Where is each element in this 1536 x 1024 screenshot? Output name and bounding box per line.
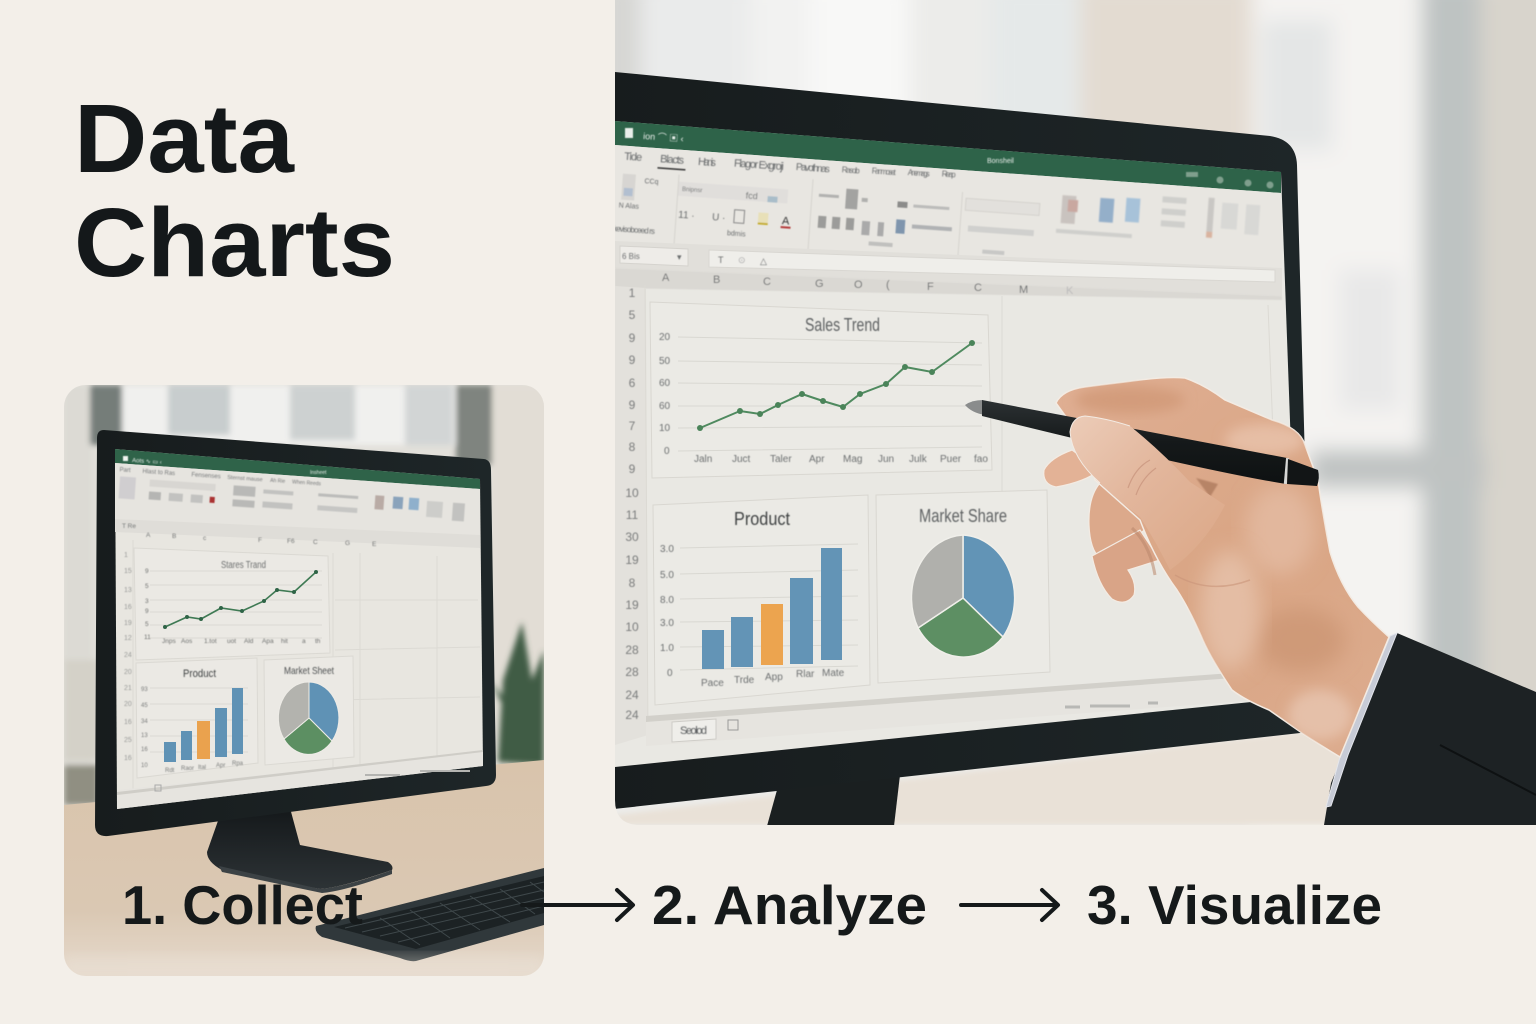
arrow from step 2 to step 3 [961, 890, 1058, 920]
line chart: sales trend: Mag [843, 454, 862, 465]
ribbon: Fensenses [191, 472, 221, 480]
line chart: stares trend: Jnps [162, 638, 176, 645]
line chart: sales trend: Sales Trend [805, 315, 880, 335]
desk surface [618, 733, 1340, 825]
formula and column strip: T Re [122, 523, 136, 530]
bar chart: product [136, 658, 258, 778]
bar chart: product: Pace [701, 678, 724, 689]
step 2 label: 2. Analyze [652, 874, 927, 936]
step 3 label: 3. Visualize [1087, 874, 1382, 936]
thumb [1070, 416, 1225, 570]
line chart: sales trend: 10 [659, 423, 671, 434]
line chart: stares trend: th [315, 638, 321, 645]
line chart: sales trend: 60 [659, 378, 671, 389]
screen [115, 449, 483, 809]
finger gap shadow [1132, 528, 1155, 575]
ribbon: fcd [745, 190, 758, 201]
row number strip [616, 286, 631, 288]
row numbers: 19 [625, 598, 639, 612]
title bar icons [625, 128, 1274, 188]
bar chart: product: Trde [734, 675, 755, 686]
ribbon: Flagor Exgroji [734, 158, 784, 173]
ribbon: Reap [941, 169, 957, 179]
title: Data Charts: Charts [74, 188, 395, 297]
row numbers: 16 [124, 604, 132, 611]
line chart: stares trend: 1.tot [204, 638, 217, 645]
bar chart: product: 93 [141, 687, 148, 693]
row numbers: 19 [625, 553, 639, 567]
shirt cuff [1326, 633, 1397, 807]
row numbers: 20 [124, 669, 132, 676]
line chart: stares trend: hit [281, 638, 288, 645]
ribbon: N Alas [618, 202, 640, 211]
line chart: stares trend: Aos [181, 638, 193, 645]
ring finger [1089, 483, 1150, 558]
row numbers [625, 286, 639, 722]
line chart: stares trend [134, 548, 330, 660]
row numbers: 28 [625, 665, 639, 679]
formula and column strip: G [345, 540, 350, 547]
bar chart: product: 8.0 [660, 595, 674, 606]
row numbers: 24 [625, 688, 639, 702]
bar chart: product: Raor [181, 766, 194, 772]
line chart: stares trend: 3 [145, 598, 149, 605]
line chart: stares trend: 5 [145, 621, 149, 628]
back of hand and wrist [1056, 378, 1389, 757]
bar chart: product: 1.0 [660, 643, 674, 654]
row numbers: 9 [629, 353, 636, 367]
bar chart: product: Apr [216, 763, 225, 769]
row numbers: 5 [629, 308, 636, 322]
status bar [117, 750, 483, 809]
row numbers: 20 [124, 701, 132, 708]
line chart: stares trend: 9 [145, 568, 149, 575]
hand holding pen [965, 378, 1389, 757]
row numbers: 7 [629, 419, 636, 433]
ribbon: 11 · [678, 210, 695, 222]
ribbon: kevisobceed rs [613, 224, 655, 236]
ribbon: Ah Rie [270, 478, 286, 485]
line chart: stares trend: a [302, 638, 306, 645]
line chart: stares trend: uot [227, 638, 236, 645]
sheet tab bar [646, 674, 1224, 742]
formula and column strip: A [146, 532, 151, 539]
column headers: B [713, 274, 720, 286]
green title bar [115, 449, 480, 489]
bar chart: product: 13 [141, 733, 148, 739]
bar chart: product: Product [183, 668, 216, 680]
row numbers: 8 [629, 440, 636, 454]
bar chart: product: 3.0 [660, 544, 674, 555]
knuckle creases [1128, 460, 1156, 495]
formula and column strip: F [258, 537, 262, 544]
row numbers: 11 [626, 508, 639, 522]
ribbon: A [782, 215, 790, 228]
ribbon: Part [119, 467, 131, 474]
row numbers: 19 [124, 620, 132, 627]
screen [615, 121, 1300, 767]
ribbon: Anemags [907, 168, 930, 179]
ribbon: Blacts [660, 153, 685, 167]
line chart: sales trend: Apr [809, 454, 825, 465]
formula bar: ⊙ [738, 255, 746, 265]
line chart: sales trend: 20 [659, 332, 671, 343]
formula bar: △ [760, 256, 767, 266]
bar chart: product: Mate [822, 668, 845, 679]
line chart: sales trend: Julk [909, 454, 928, 465]
formula and column strip: C [313, 539, 318, 546]
column headers: K [1066, 285, 1074, 297]
formula and column strip: B [172, 533, 176, 540]
pie chart: market share [876, 490, 1050, 683]
bar chart: product: 0 [667, 668, 673, 679]
green title bar [615, 121, 1281, 193]
line chart: stares trend: 5 [145, 583, 149, 590]
line chart: sales trend: 0 [664, 446, 670, 457]
row numbers: 24 [625, 708, 639, 722]
ribbon: Sternst mause [227, 475, 263, 483]
bar chart: product: 5.0 [660, 570, 674, 581]
bar chart: product: 10 [141, 763, 148, 769]
monitor stand [767, 775, 900, 826]
bar chart: product: 34 [141, 719, 148, 725]
ribbon: Fanmoset [871, 166, 897, 177]
crease below pen [1196, 478, 1218, 497]
thumb edge [1070, 416, 1130, 483]
row numbers: 12 [124, 635, 132, 642]
keyboard [316, 868, 544, 961]
line chart: stares trend: 11 [144, 634, 151, 641]
line chart: stares trend: 9 [145, 608, 149, 615]
title bar icons: ion ⌒ ▣ ‹ [643, 131, 684, 144]
row numbers: 13 [124, 587, 132, 594]
pie chart: market share: Market Share [919, 506, 1007, 526]
panel: pen on monitor photo [600, 0, 1536, 880]
formula bar: T [718, 255, 724, 265]
ribbon: U · [712, 212, 726, 224]
row numbers: 16 [124, 755, 132, 762]
sheet gridlines [133, 540, 480, 790]
row numbers [124, 552, 132, 762]
panel: desk monitor photo [64, 385, 552, 976]
bar chart: product: 16 [141, 747, 148, 753]
line chart: sales trend: 50 [659, 356, 671, 367]
title bar labels [123, 456, 327, 476]
ribbon: Bnipnsr [682, 187, 702, 194]
palm crease [1175, 575, 1250, 586]
formula bar: 6 Bis [622, 252, 640, 261]
ribbon: Pavothnas [795, 162, 830, 175]
ribbon: bdmis [727, 230, 746, 239]
line chart: sales trend: fao [974, 454, 988, 465]
ribbon: Tide [624, 151, 643, 164]
column headers: ( [886, 279, 890, 291]
hand shading [1075, 386, 1352, 740]
line chart: sales trend: Taler [770, 454, 792, 465]
line chart: sales trend: Puer [940, 454, 962, 465]
row numbers: 28 [625, 643, 639, 657]
line chart: stares trend: Ald [244, 638, 254, 645]
column headers: C [974, 282, 982, 294]
line chart: stares trend: Apa [262, 638, 274, 645]
bar chart: product [653, 495, 870, 705]
row numbers: 10 [625, 486, 639, 500]
step 1 label: 1. Collect [122, 874, 363, 936]
middle finger [1044, 450, 1100, 487]
column headers [615, 268, 1282, 300]
column headers: C [763, 276, 771, 288]
column headers: A [662, 272, 670, 284]
bar chart: product: App [765, 672, 783, 683]
line chart: sales trend: Juct [732, 454, 751, 465]
formula and column strip: F6 [287, 538, 295, 545]
row numbers: 16 [124, 719, 132, 726]
row numbers: 9 [629, 462, 636, 476]
row numbers: 24 [124, 652, 132, 659]
bar chart: product: Rdt [165, 768, 175, 774]
small monitor [95, 430, 496, 836]
ribbon: Hlast to Ras [142, 469, 175, 477]
row numbers: 21 [124, 685, 132, 692]
little finger [1092, 530, 1160, 602]
title bar icons: Bonsheil [987, 158, 1014, 165]
title: Data Charts [74, 84, 395, 297]
column headers: M [1019, 284, 1028, 296]
arrow from step 1 to step 2 [522, 890, 633, 920]
pen [965, 400, 1319, 486]
blurred window background [615, 0, 1536, 692]
title bar labels: Aots ∿ ▭ ‹ [132, 458, 162, 466]
bezel [95, 430, 496, 836]
title bar labels: Insheet [310, 470, 327, 476]
row numbers: 1 [124, 552, 128, 559]
ribbon: CCq [644, 178, 659, 186]
line chart: sales trend: Jun [878, 454, 894, 465]
formula and column strip: E [372, 541, 377, 548]
blurred plant [490, 622, 544, 765]
line chart: stares trend: Stares Trand [221, 560, 266, 571]
bezel [605, 71, 1312, 810]
row numbers: 9 [629, 398, 636, 412]
sheet tab bar: Seolod [680, 725, 707, 737]
row numbers: 15 [124, 568, 132, 575]
title: Data Charts: Data [74, 84, 295, 193]
ribbon: When Reeds [292, 479, 322, 487]
wooden desk [64, 760, 544, 976]
row numbers: 25 [124, 737, 132, 744]
row numbers: 6 [629, 376, 636, 390]
pie chart: market sheet [264, 656, 354, 765]
bar chart: product: 3.0 [660, 618, 674, 629]
ribbon [115, 463, 480, 522]
bar chart: product: Ital [198, 765, 206, 771]
blurred office background [64, 385, 552, 805]
bar chart: product: 45 [141, 703, 148, 709]
line chart: sales trend: Jaln [694, 454, 712, 465]
column headers: G [815, 278, 824, 290]
large monitor [605, 71, 1312, 810]
bar chart: product: Rpa [232, 761, 244, 767]
column headers: O [854, 279, 863, 291]
bar chart: product: Product [734, 509, 790, 529]
row numbers: 30 [625, 530, 639, 544]
suit sleeve [1324, 633, 1536, 825]
row numbers: 8 [629, 576, 636, 590]
sheet grid [645, 285, 1283, 735]
row numbers: 1 [629, 286, 636, 300]
column headers: F [927, 281, 934, 293]
card bottom fade [374, 950, 452, 962]
formula and column strip: c [203, 535, 207, 542]
formula bar [615, 241, 1282, 296]
monitor stand [207, 808, 392, 893]
line chart: sales trend [650, 302, 992, 478]
ribbon [615, 145, 1280, 256]
pie chart: market sheet: Market Sheet [284, 665, 334, 677]
line chart: sales trend: 60 [659, 401, 671, 412]
row numbers: 9 [629, 331, 636, 345]
bar chart: product: Rlar [796, 669, 815, 680]
formula and column strip [115, 519, 480, 548]
row numbers: 10 [625, 620, 639, 634]
formula bar: ▾ [677, 252, 682, 262]
ribbon: Hanis [698, 156, 717, 169]
ribbon: Rasoib [841, 165, 861, 176]
